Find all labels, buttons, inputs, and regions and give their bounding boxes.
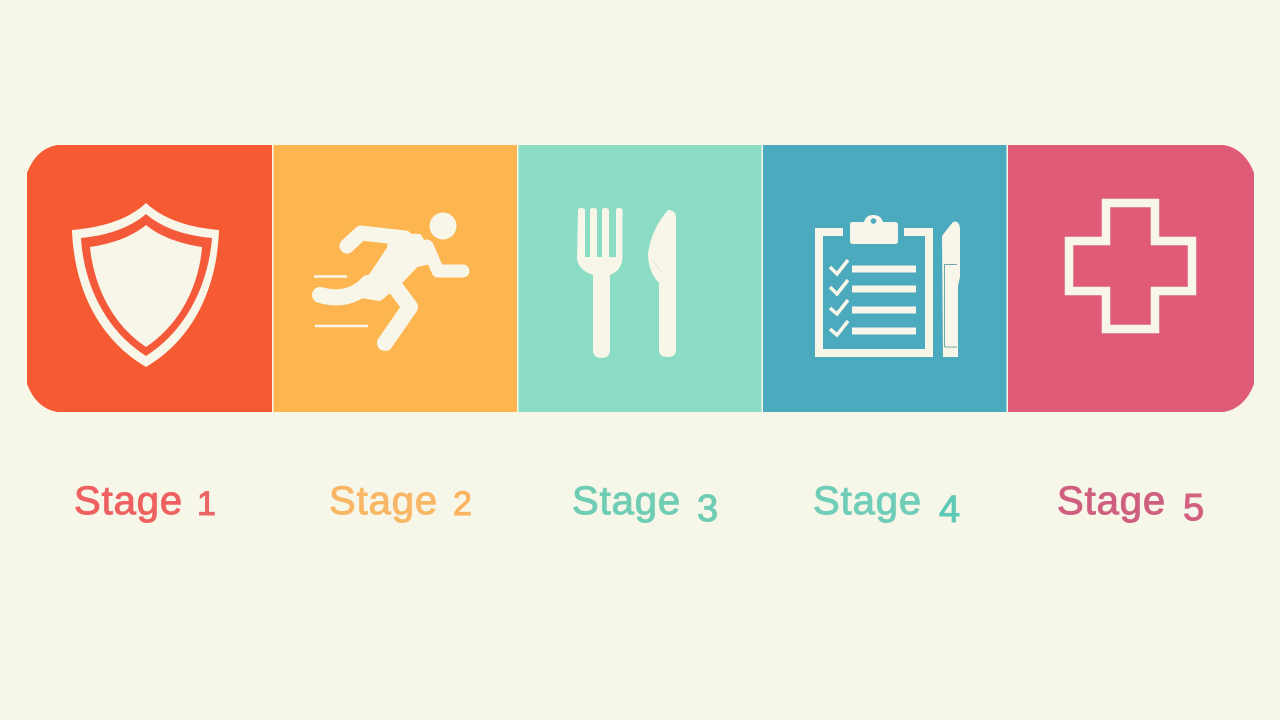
label: stage 2: 2 (453, 485, 473, 523)
icon: fork (577, 208, 622, 358)
icon: runner (314, 212, 463, 343)
panel: stage 4 (763, 145, 1006, 412)
label: stage 2: Stage (329, 479, 438, 523)
label: stage 5 (1057, 479, 1205, 529)
label: stage 4: Stage (813, 479, 922, 523)
label: stage 3 (572, 479, 719, 530)
panel: stage 1 (27, 145, 272, 412)
icon: knife (648, 210, 676, 357)
label: stage 3: Stage (572, 479, 681, 523)
icon: shield (72, 203, 219, 367)
label: stage 1: 1 (197, 485, 217, 523)
label: stage 1: Stage (74, 479, 183, 523)
clipboard frame (819, 232, 929, 353)
label: stage 4 (813, 479, 961, 531)
checklist lines (852, 269, 916, 331)
label: stage 3: 3 (697, 488, 719, 530)
label: stage 5: 5 (1183, 487, 1205, 529)
label: stage 4: 4 (939, 489, 961, 531)
pen (942, 222, 960, 357)
label: stage 5: Stage (1057, 479, 1166, 523)
checkmarks (830, 260, 848, 335)
icon: fork and knife (577, 208, 676, 358)
icon: clipboard and pen (819, 215, 960, 357)
panel: stage 3 (518, 145, 762, 412)
stage band (27, 145, 1254, 412)
panel: stage 5 (1008, 145, 1254, 412)
icon: medical cross (1069, 203, 1192, 329)
clipboard clip (850, 215, 898, 244)
panel: stage 2 (274, 145, 517, 412)
